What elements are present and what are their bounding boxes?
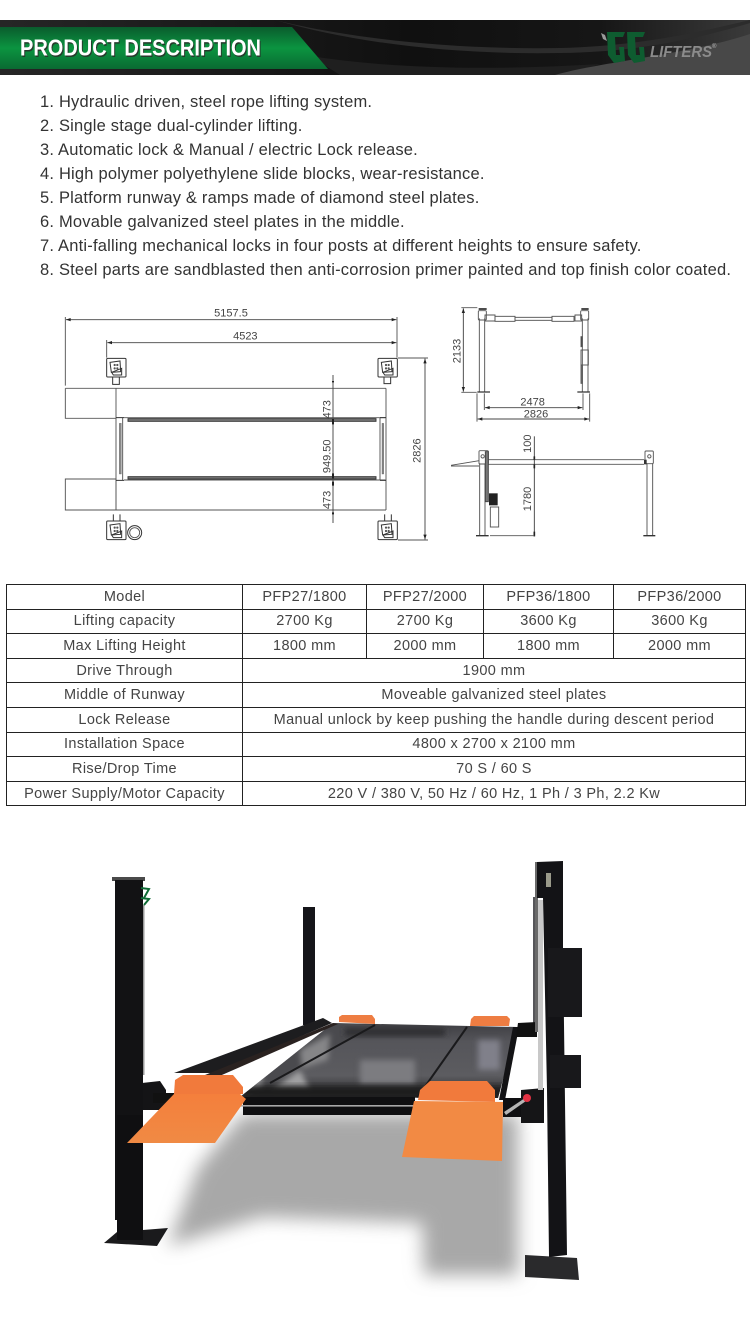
specification table: PFP36/1800	[506, 589, 591, 605]
front view	[477, 309, 590, 392]
feature list: 4. High polymer polyethylene slide blocks, wear-resistance.	[40, 165, 485, 183]
specification table: 1800 mm	[273, 638, 336, 654]
specification table: Drive Through	[76, 663, 173, 679]
runway width dimensions: 473	[321, 491, 333, 509]
specification table: Manual unlock by keep pushing the handle during descent period	[274, 712, 714, 728]
floor shadow	[168, 1114, 518, 1275]
feature list: 3. Automatic lock & Manual / electric Lock release.	[40, 141, 418, 159]
side view height dimensions: 100	[522, 434, 534, 453]
post spacing dimension: 4523	[233, 331, 258, 343]
specification table: PFP36/2000	[637, 589, 722, 605]
runway width dimensions: 473	[321, 400, 333, 419]
specification table: PFP27/1800	[262, 589, 347, 605]
specification table: Installation Space	[64, 736, 185, 752]
product photo: four post lift	[104, 861, 582, 1286]
specification table: 3600 Kg	[520, 613, 577, 629]
front view width dimensions: 2826	[524, 408, 548, 420]
specification table: Model	[104, 589, 145, 605]
specification table: PFP27/2000	[383, 589, 467, 605]
specification table: Power Supply/Motor Capacity	[24, 786, 225, 802]
feature list	[40, 93, 731, 279]
heading text: PRODUCT DESCRIPTION	[20, 34, 261, 60]
runway width dimensions: 949.50	[321, 440, 333, 473]
post base plates	[107, 358, 397, 540]
green title ribbon	[0, 27, 328, 69]
specification table: 2700 Kg	[397, 613, 453, 629]
specification table: Rise/Drop Time	[72, 761, 177, 777]
specification table: Lock Release	[78, 712, 171, 728]
feature list: 5. Platform runway & ramps made of diamond steel plates.	[40, 189, 479, 207]
specification table: 2000 mm	[648, 638, 711, 654]
front view width dimensions: 2478	[520, 397, 545, 409]
heading shadow: PRODUCT DESCRIPTION	[21, 36, 262, 62]
header banner	[0, 20, 750, 75]
overall length dimension	[65, 307, 397, 386]
logo: GG Lifters: ®	[712, 43, 717, 50]
runways and ramps	[65, 388, 386, 510]
specification table: 4800 x 2700 x 2100 mm	[412, 736, 576, 752]
overall length dimension: 5157.5	[214, 307, 248, 319]
front view height dimension: 2133	[452, 339, 464, 363]
top view dimension drawing	[64, 307, 428, 540]
specification table: Max Lifting Height	[63, 638, 186, 654]
deck platform	[174, 1018, 537, 1117]
feature list: 2. Single stage dual-cylinder lifting.	[40, 117, 303, 135]
runway width dimensions	[321, 375, 333, 523]
front left ramp	[127, 1075, 246, 1143]
feature list: 1. Hydraulic driven, steel rope lifting system.	[40, 93, 372, 111]
logo: GG Lifters: LIFTERS	[650, 44, 712, 61]
specification table	[6, 584, 746, 806]
specification table: 2700 Kg	[276, 613, 333, 629]
feature list: 6. Movable galvanized steel plates in the middle.	[40, 213, 405, 231]
front view height dimension	[452, 308, 477, 392]
specification table: 1900 mm	[463, 663, 525, 679]
specification table: 70 S / 60 S	[456, 761, 532, 777]
logo: GG Lifters	[601, 32, 717, 63]
front right ramp	[402, 1081, 503, 1161]
specification table: Moveable galvanized steel plates	[381, 687, 607, 703]
specification table: Lifting capacity	[74, 613, 175, 629]
cross beam blocks	[133, 1081, 544, 1123]
front right post	[525, 861, 582, 1280]
overall width dimension: 2826	[412, 438, 424, 463]
side view	[451, 451, 655, 536]
feature list: 7. Anti-falling mechanical locks in four posts at different heights to ensure safety.	[40, 237, 642, 255]
back orange ramps	[339, 1015, 510, 1026]
front view width dimensions	[477, 393, 590, 422]
back left post	[303, 907, 315, 1025]
specification table: Middle of Runway	[64, 687, 185, 703]
specification table: 3600 Kg	[651, 613, 708, 629]
feature list: 8. Steel parts are sandblasted then anti-corrosion primer painted and top finish color coated.	[40, 261, 731, 279]
specification table: 1800 mm	[517, 638, 580, 654]
specification table: 220 V / 380 V, 50 Hz / 60 Hz, 1 Ph / 3 Ph, 2.2 Kw	[328, 786, 660, 802]
front and side view drawings	[451, 307, 656, 536]
back right post	[533, 897, 538, 1023]
side view height dimensions: 1780	[522, 487, 534, 511]
side view height dimensions	[490, 434, 534, 536]
overall width dimension	[398, 358, 428, 540]
front left post	[104, 877, 168, 1246]
specification table: 2000 mm	[394, 638, 456, 654]
